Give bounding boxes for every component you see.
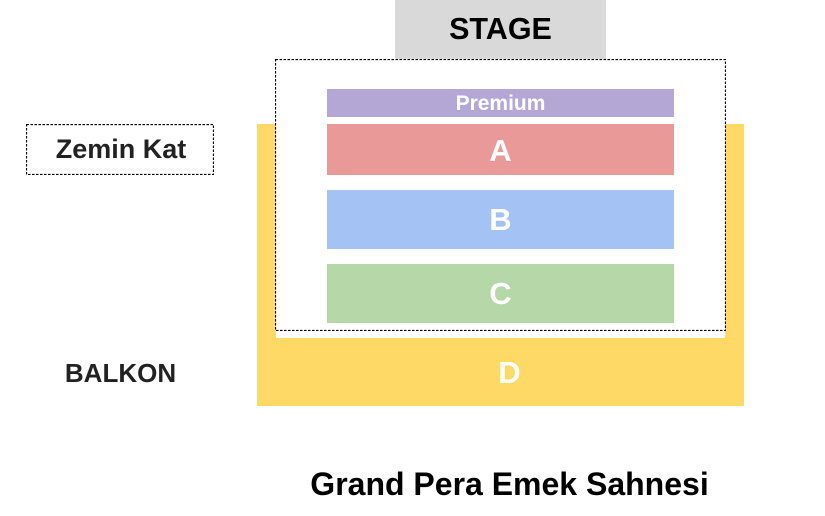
label: D: D: [498, 354, 521, 390]
stage: STAGE: [449, 12, 552, 46]
title: Grand Pera Emek Sahnesi: [310, 466, 709, 502]
stage: [395, 0, 606, 59]
label: Zemin Kat: Zemin Kat: [56, 134, 186, 164]
label: Zemin Kat: [26, 124, 214, 175]
section: Premium: [327, 89, 674, 117]
section: C: C: [489, 276, 512, 310]
section: Premium: Premium: [456, 92, 545, 115]
balcony: D section: [257, 124, 744, 406]
dashed box: [26, 124, 214, 175]
section: B: [327, 190, 674, 249]
section: B: B: [489, 202, 512, 236]
ground floor dashed outline: [275, 59, 726, 331]
ground floor white area: [276, 59, 725, 338]
section: A: A: [489, 132, 512, 168]
label: BALKON: BALKON: [65, 358, 176, 388]
section: A: [327, 124, 674, 175]
section: C: [327, 264, 674, 323]
